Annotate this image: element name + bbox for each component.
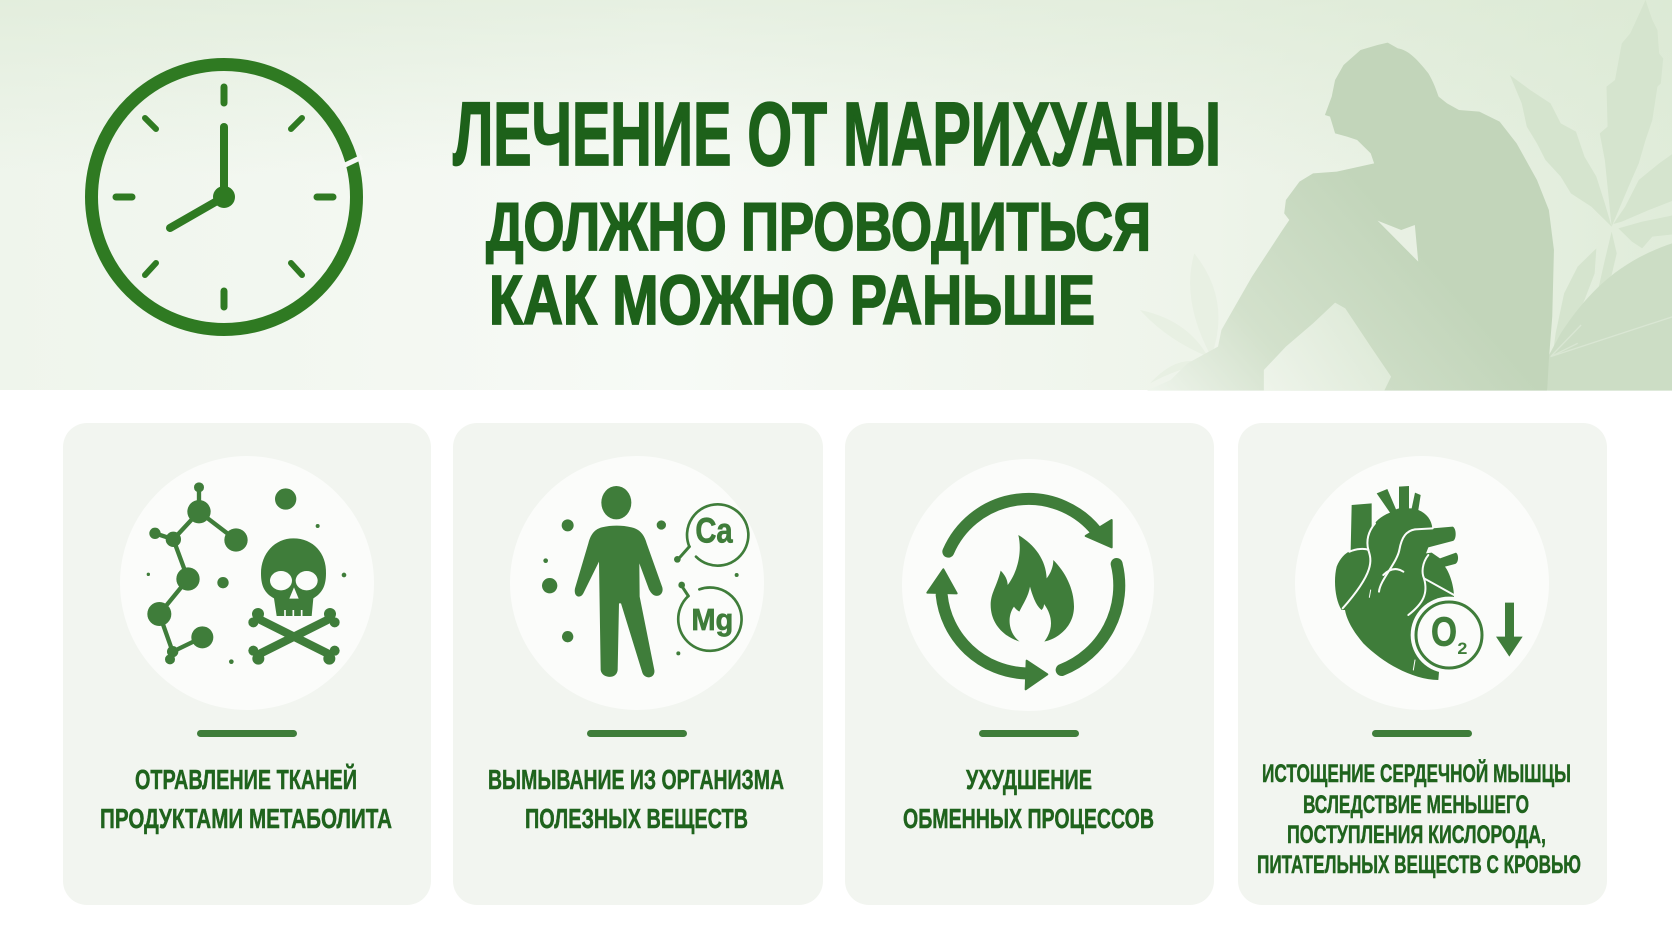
icon: calcium and magnesium: Ca (695, 512, 733, 551)
label: nutrient washout: ВЫМЫВАНИЕ ИЗ ОРГАНИЗМА (488, 764, 784, 795)
icon: molecule and skull (147, 482, 346, 665)
icon: calcium and magnesium (674, 504, 748, 651)
label: tissue poisoning (100, 763, 392, 834)
icon: clock (92, 64, 362, 330)
icon: heart with low oxygen: O (1431, 609, 1457, 655)
divider bar (1372, 730, 1472, 737)
illustration: silhouette with cannabis leaves (1140, 0, 1672, 391)
panel: header banner (0, 0, 1672, 390)
divider bar (979, 730, 1079, 737)
divider bar (197, 730, 297, 737)
title (453, 85, 1221, 339)
label: metabolism (903, 764, 1154, 834)
label: heart muscle: ВСЛЕДСТВИЕ МЕНЬШЕГО (1303, 791, 1529, 819)
label: heart muscle (1257, 758, 1581, 879)
panel: tissue poisoning (63, 423, 431, 905)
icon: calcium and magnesium: Mg (691, 603, 733, 637)
icon: cycle arrows and flame (927, 499, 1119, 689)
panel: heart muscle (1238, 423, 1607, 905)
label: metabolism: ОБМЕННЫХ ПРОЦЕССОВ (903, 803, 1154, 834)
label: heart muscle: ПОСТУПЛЕНИЯ КИСЛОРОДА, (1287, 821, 1546, 849)
icon: person (542, 486, 739, 677)
label: tissue poisoning: ОТРАВЛЕНИЕ ТКАНЕЙ (135, 763, 357, 795)
label: nutrient washout: ПОЛЕЗНЫХ ВЕЩЕСТВ (525, 803, 748, 834)
title: ДОЛЖНО ПРОВОДИТЬСЯ (486, 189, 1151, 265)
title: КАК МОЖНО РАНЬШЕ (489, 261, 1095, 339)
panel: nutrient washout (453, 423, 823, 905)
icon: heart with low oxygen (1335, 486, 1523, 680)
panel: metabolism (845, 423, 1214, 905)
label: nutrient washout (488, 764, 784, 834)
icon: heart with low oxygen: 2 (1457, 639, 1467, 658)
title: ЛЕЧЕНИЕ ОТ МАРИХУАНЫ (453, 85, 1221, 185)
divider bar (587, 730, 687, 737)
label: tissue poisoning: ПРОДУКТАМИ МЕТАБОЛИТА (100, 803, 392, 834)
label: metabolism: УХУДШЕНИЕ (966, 764, 1092, 795)
